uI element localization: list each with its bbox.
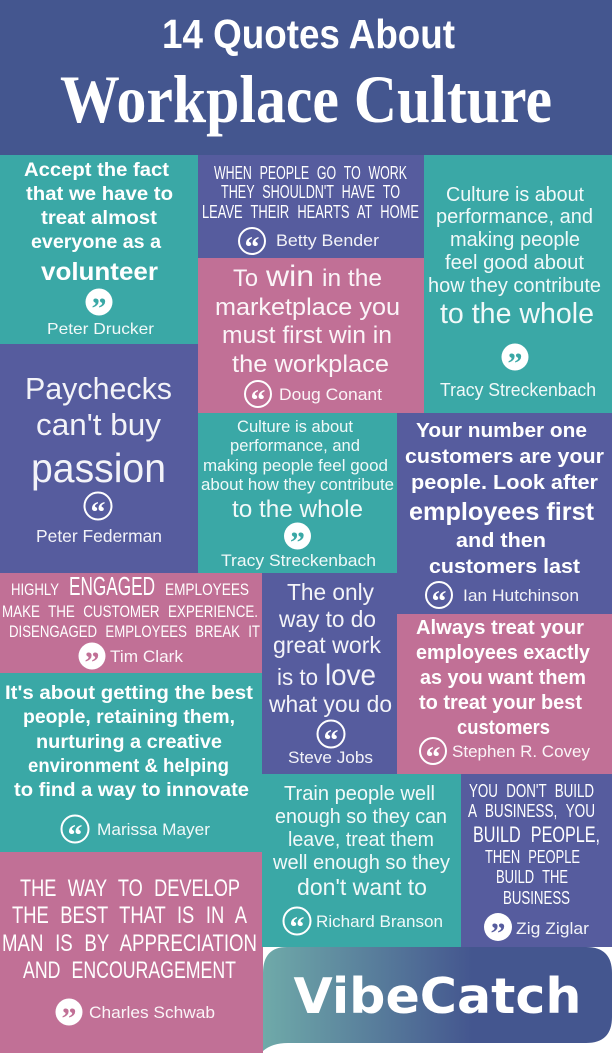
panel: Charles Schwab quote: AND ENCOURAGEMENT bbox=[23, 957, 236, 984]
panel: Doug Conant quote: the workplace bbox=[232, 351, 389, 378]
panel: Peter Drucker quote: Accept the fact bbox=[24, 160, 170, 181]
panel: Charles Schwab quote: THE BEST THAT IS IN A bbox=[12, 902, 247, 929]
panel: Doug Conant quote: marketplace you bbox=[215, 294, 400, 321]
panel: Tim Clark quote: DISENGAGED EMPLOYEES BREAK IT bbox=[9, 622, 260, 641]
panel: Marissa Mayer quote: environment & helping bbox=[28, 756, 229, 777]
icon: quote mark: “ bbox=[324, 724, 338, 757]
header panel bbox=[0, 0, 612, 155]
panel: Stephen R. Covey quote: customers bbox=[457, 717, 550, 739]
panel: Tracy Streckenbach quote 1: making people bbox=[450, 229, 580, 251]
panel: Richard Branson quote: Train people well bbox=[284, 783, 435, 805]
icon: quote mark bbox=[420, 738, 446, 774]
panel: Zig Ziglar quote: Zig Ziglar bbox=[516, 919, 589, 938]
panel: Charles Schwab quote bbox=[0, 852, 263, 1053]
icon: quote mark bbox=[56, 998, 82, 1035]
panel: Peter Drucker quote: everyone as a bbox=[31, 232, 161, 253]
panel: Tim Clark quote: Tim Clark bbox=[110, 647, 183, 666]
panel: Marissa Mayer quote: It's about getting the best bbox=[5, 683, 254, 704]
panel: Tim Clark quote: HIGHLY bbox=[11, 580, 59, 599]
icon: quote mark: “ bbox=[290, 911, 304, 944]
panel: Peter Federman quote: passion bbox=[31, 445, 166, 491]
panel: Tim Clark quote bbox=[0, 571, 262, 679]
logo panel: VibeCatch bbox=[263, 947, 612, 1051]
icon: quote mark: “ bbox=[432, 585, 446, 618]
panel: Peter Drucker quote: Peter Drucker bbox=[47, 321, 155, 338]
panel: Peter Drucker quote bbox=[0, 155, 198, 344]
panel: Tim Clark quote: ENGAGED bbox=[69, 571, 155, 601]
icon: quote mark bbox=[318, 720, 344, 757]
icon: quote mark bbox=[62, 816, 88, 852]
panel: Doug Conant quote: must first win in bbox=[222, 322, 392, 349]
icon: quote mark: “ bbox=[250, 384, 266, 417]
panel: Doug Conant quote: To bbox=[233, 265, 258, 292]
title line 2: Workplace Culture bbox=[60, 61, 552, 137]
icon: quote mark: “ bbox=[68, 819, 82, 852]
panel: Ian Hutchinson quote: customers are your bbox=[405, 446, 604, 468]
panel: Betty Bender quote: LEAVE THEIR HEARTS AT HOME bbox=[202, 202, 419, 222]
panel: Peter Federman quote: Paychecks bbox=[25, 371, 172, 406]
panel: Doug Conant quote: win bbox=[265, 260, 314, 293]
icon: quote mark bbox=[239, 228, 265, 264]
panel: Tracy Streckenbach quote 1: Culture is about bbox=[446, 184, 584, 206]
panel: Peter Federman quote: can't buy bbox=[36, 407, 162, 442]
panel: Steve Jobs quote: what you do bbox=[268, 691, 392, 717]
logo panel: VibeCatch: VibeCatch bbox=[294, 968, 582, 1025]
panel: Betty Bender quote bbox=[198, 155, 424, 264]
title line 1: 14 Quotes About bbox=[162, 11, 455, 57]
panel: Tracy Streckenbach quote 1: to the whole bbox=[440, 298, 594, 330]
panel: Richard Branson quote: well enough so they bbox=[272, 852, 450, 874]
icon: quote mark bbox=[284, 908, 310, 944]
panel: Marissa Mayer quote: Marissa Mayer bbox=[97, 820, 210, 839]
panel: Marissa Mayer quote: people, retaining them, bbox=[23, 707, 235, 728]
panel: Tim Clark quote: MAKE THE CUSTOMER EXPERIENCE. bbox=[2, 602, 258, 621]
panel: Steve Jobs quote: great work bbox=[273, 632, 382, 658]
panel: Charles Schwab quote: Charles Schwab bbox=[89, 1003, 215, 1022]
panel: Peter Federman quote: Peter Federman bbox=[36, 526, 162, 546]
panel: Ian Hutchinson quote: customers last bbox=[429, 556, 580, 578]
panel: Peter Federman quote bbox=[0, 344, 198, 573]
panel: Tracy Streckenbach quote 2: making people feel good bbox=[203, 456, 388, 475]
panel: Marissa Mayer quote: nurturing a creative bbox=[36, 732, 222, 753]
panel: Tracy Streckenbach quote 1: feel good about bbox=[445, 252, 584, 274]
panel: Steve Jobs quote: The only bbox=[287, 579, 374, 605]
panel: Tracy Streckenbach quote 1: performance, and bbox=[436, 206, 593, 228]
panel: Tracy Streckenbach quote 2 bbox=[198, 413, 397, 573]
panel: Marissa Mayer quote bbox=[0, 673, 262, 852]
panel: Charles Schwab quote: MAN IS BY APPRECIATION bbox=[2, 930, 257, 957]
panel: Richard Branson quote: don't want to bbox=[297, 874, 427, 900]
panel: Tracy Streckenbach quote 2: about how they contribute bbox=[201, 475, 394, 494]
icon: quote mark: “ bbox=[90, 496, 106, 529]
panel: Ian Hutchinson quote: people. Look after bbox=[411, 472, 598, 494]
icon: quote mark: ” bbox=[290, 526, 305, 559]
icon: quote mark bbox=[284, 522, 311, 559]
panel: Tracy Streckenbach quote 2: performance, and bbox=[230, 436, 360, 455]
icon: quote mark: ” bbox=[62, 1002, 76, 1035]
panel: Tracy Streckenbach quote 1: Tracy Streckenbach bbox=[440, 380, 596, 400]
panel: Betty Bender quote: WHEN PEOPLE GO TO WORK bbox=[214, 163, 407, 183]
panel: Zig Ziglar quote: BUILD THE bbox=[496, 867, 568, 887]
panel: Stephen R. Covey quote: to treat your best bbox=[419, 692, 582, 714]
panel: Tim Clark quote: EMPLOYEES bbox=[165, 580, 249, 599]
panel: Steve Jobs quote: way to do bbox=[278, 606, 376, 632]
icon: quote mark: ” bbox=[508, 347, 522, 380]
panel: Zig Ziglar quote: BUSINESS bbox=[503, 888, 570, 908]
panel: Betty Bender quote: THEY SHOULDN'T HAVE TO bbox=[221, 182, 400, 202]
icon: quote mark: ” bbox=[92, 292, 106, 325]
icon: quote mark bbox=[245, 381, 271, 417]
panel: Stephen R. Covey quote: employees exactly bbox=[416, 642, 591, 664]
panel: Peter Drucker quote: volunteer bbox=[41, 258, 158, 286]
panel: Doug Conant quote bbox=[198, 258, 424, 417]
icon: quote mark bbox=[502, 344, 528, 380]
panel: Ian Hutchinson quote: Ian Hutchinson bbox=[463, 586, 579, 605]
panel: Tracy Streckenbach quote 1: how they contribute bbox=[428, 275, 601, 297]
panel: Steve Jobs quote: is to bbox=[277, 664, 318, 690]
icon: quote mark bbox=[86, 288, 112, 325]
panel: Tracy Streckenbach quote 1 bbox=[424, 155, 612, 413]
panel: Steve Jobs quote: love bbox=[325, 659, 376, 692]
panel: Stephen R. Covey quote: Always treat your bbox=[416, 617, 584, 639]
icon: quote mark bbox=[84, 492, 112, 529]
panel: Richard Branson quote: enough so they can bbox=[275, 806, 447, 828]
icon: quote mark bbox=[78, 642, 106, 679]
panel: Peter Drucker quote: treat almost bbox=[41, 208, 158, 229]
panel: Tracy Streckenbach quote 2: Culture is about bbox=[237, 417, 353, 436]
icon: quote mark: “ bbox=[426, 741, 440, 774]
panel: Stephen R. Covey quote bbox=[397, 614, 612, 774]
icon: quote mark bbox=[484, 913, 512, 950]
panel: Steve Jobs quote: Steve Jobs bbox=[288, 748, 373, 767]
panel: Steve Jobs quote bbox=[262, 573, 397, 774]
icon: quote mark: ” bbox=[84, 646, 100, 679]
icon: quote mark: ” bbox=[490, 917, 506, 950]
panel: Doug Conant quote: in the bbox=[322, 265, 382, 292]
panel: Betty Bender quote: Betty Bender bbox=[276, 231, 379, 250]
panel: Marissa Mayer quote: to find a way to innovate bbox=[14, 780, 249, 801]
panel: Ian Hutchinson quote: employees first bbox=[409, 498, 595, 526]
panel: Ian Hutchinson quote: Your number one bbox=[416, 420, 587, 442]
panel: Peter Drucker quote: that we have to bbox=[26, 184, 173, 205]
panel: Zig Ziglar quote bbox=[461, 774, 612, 950]
icon: quote mark: “ bbox=[244, 231, 260, 264]
panel: Tracy Streckenbach quote 2: Tracy Streckenbach bbox=[221, 551, 376, 570]
panel: Stephen R. Covey quote: Stephen R. Covey bbox=[452, 742, 590, 761]
panel: Doug Conant quote: Doug Conant bbox=[279, 385, 382, 404]
panel: Ian Hutchinson quote: and then bbox=[456, 530, 546, 552]
panel: Ian Hutchinson quote bbox=[397, 413, 612, 618]
panel: Tracy Streckenbach quote 2: to the whole bbox=[232, 496, 363, 523]
panel: Richard Branson quote: leave, treat them bbox=[288, 829, 434, 851]
panel: Richard Branson quote: Richard Branson bbox=[316, 912, 443, 931]
panel: Richard Branson quote bbox=[262, 774, 461, 947]
icon: quote mark bbox=[426, 582, 452, 618]
panel: Charles Schwab quote: THE WAY TO DEVELOP bbox=[20, 875, 240, 902]
panel: Stephen R. Covey quote: as you want them bbox=[420, 667, 586, 689]
